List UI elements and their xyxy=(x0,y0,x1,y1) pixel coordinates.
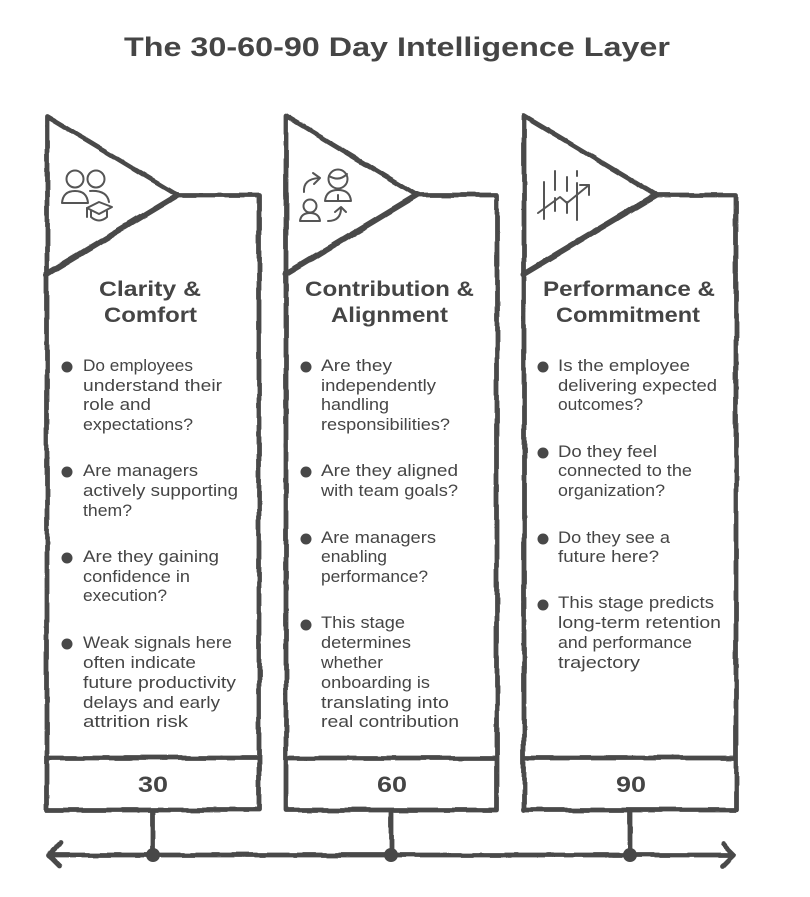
bullet: role understanding xyxy=(62,357,223,434)
bullet: stage meaning: translating into xyxy=(321,694,449,712)
icon: people with graduation cap xyxy=(62,170,112,220)
bullet: retention prediction: trajectory xyxy=(558,654,641,672)
bullet: organizational connection: connected to the xyxy=(558,462,692,480)
bullet: role understanding: understand their xyxy=(83,377,223,395)
bullet: organizational connection: Do they feel xyxy=(558,443,657,461)
bullet: future here: Do they see a xyxy=(558,529,671,547)
bullet: manager support: actively supporting xyxy=(83,482,238,500)
bullet: manager support xyxy=(62,462,238,520)
day label: 30: 30 xyxy=(138,772,168,797)
bullet: weak signals: future productivity xyxy=(83,674,237,692)
heading: performance and commitment: Performance & xyxy=(543,278,715,301)
timeline marker: 60 xyxy=(384,848,398,862)
bullet: independence: independently xyxy=(321,377,437,395)
bullet: enabling managers xyxy=(300,529,436,586)
heading: performance and commitment xyxy=(543,278,715,327)
heading: clarity and comfort: Comfort xyxy=(104,304,197,327)
bullet: stage meaning xyxy=(300,614,459,731)
bullet: weak signals: attrition risk xyxy=(83,713,189,731)
bullet: expected outcomes: Is the employee xyxy=(558,357,690,375)
bullet: stage meaning: real contribution xyxy=(321,713,459,731)
heading: clarity and comfort: Clarity & xyxy=(99,278,201,301)
bullet: independence xyxy=(300,357,450,434)
bullet: independence: responsibilities? xyxy=(321,416,450,434)
heading: contribution and alignment: Alignment xyxy=(331,304,448,327)
bullet: confidence: execution? xyxy=(83,587,167,605)
panel outline: day 60 xyxy=(286,116,497,810)
timeline marker: 30 xyxy=(146,848,160,862)
panel outline: day 30 xyxy=(47,116,259,810)
bullet: retention prediction: long-term retention xyxy=(558,614,721,632)
bullet: stage meaning: This stage xyxy=(321,614,405,632)
bullet: confidence: Are they gaining xyxy=(83,548,219,566)
bullet: expected outcomes: outcomes? xyxy=(558,396,643,414)
heading: clarity and comfort xyxy=(99,278,201,327)
bullet: organizational connection xyxy=(538,443,692,500)
icon: people with arrows xyxy=(300,170,351,221)
bullet: team alignment: Are they aligned xyxy=(321,462,458,480)
bullet: stage meaning: determines xyxy=(321,634,411,652)
bullet: retention prediction: This stage predicts xyxy=(558,594,714,612)
heading: contribution and alignment xyxy=(305,278,474,327)
icon: rising trend chart xyxy=(538,171,589,220)
timeline marker: 90 xyxy=(623,848,637,862)
panel outline: day 90 xyxy=(524,116,736,810)
bullet: role understanding: Do employees xyxy=(83,357,193,375)
panel: day 30 xyxy=(47,116,259,810)
bullet: weak signals: delays and early xyxy=(83,694,221,712)
bullet: confidence: confidence in xyxy=(83,568,190,586)
bullet: retention prediction: and performance xyxy=(558,634,692,652)
bullet: weak signals: Weak signals here xyxy=(83,634,232,652)
heading: performance and commitment: Commitment xyxy=(556,304,700,327)
title: The 30-60-90 Day Intelligence Layer xyxy=(124,32,671,62)
bullet: role understanding: role and xyxy=(83,396,151,414)
bullet: enabling managers: performance? xyxy=(321,568,428,586)
bullet: manager support: Are managers xyxy=(83,462,198,480)
bullet: confidence xyxy=(62,548,219,605)
bullet: role understanding: expectations? xyxy=(83,416,193,434)
bullet: manager support: them? xyxy=(83,502,132,520)
bullet: enabling managers: Are managers xyxy=(321,529,436,547)
panel: day 90 xyxy=(524,116,736,810)
bullet: team alignment xyxy=(300,462,458,500)
timeline arrow xyxy=(49,812,734,866)
bullet: retention prediction xyxy=(538,594,721,672)
bullet: independence: handling xyxy=(321,396,389,414)
bullet: expected outcomes: delivering expected xyxy=(558,377,717,395)
bullet: independence: Are they xyxy=(321,357,393,375)
bullet: stage meaning: onboarding is xyxy=(321,674,430,692)
bullet: team alignment: with team goals? xyxy=(320,482,458,500)
bullet: future here xyxy=(538,529,671,566)
bullet: weak signals: often indicate xyxy=(83,654,196,672)
bullet: weak signals xyxy=(62,634,237,731)
bullet: stage meaning: whether xyxy=(320,654,384,672)
bullet: expected outcomes xyxy=(538,357,717,414)
heading: contribution and alignment: Contribution & xyxy=(305,278,474,301)
bullet: organizational connection: organization? xyxy=(558,482,665,500)
panel: day 60 xyxy=(286,116,497,810)
bullet: enabling managers: enabling xyxy=(321,548,387,566)
day label: 60: 60 xyxy=(377,772,407,797)
day label: 90: 90 xyxy=(616,772,646,797)
bullet: future here: future here? xyxy=(558,548,659,566)
